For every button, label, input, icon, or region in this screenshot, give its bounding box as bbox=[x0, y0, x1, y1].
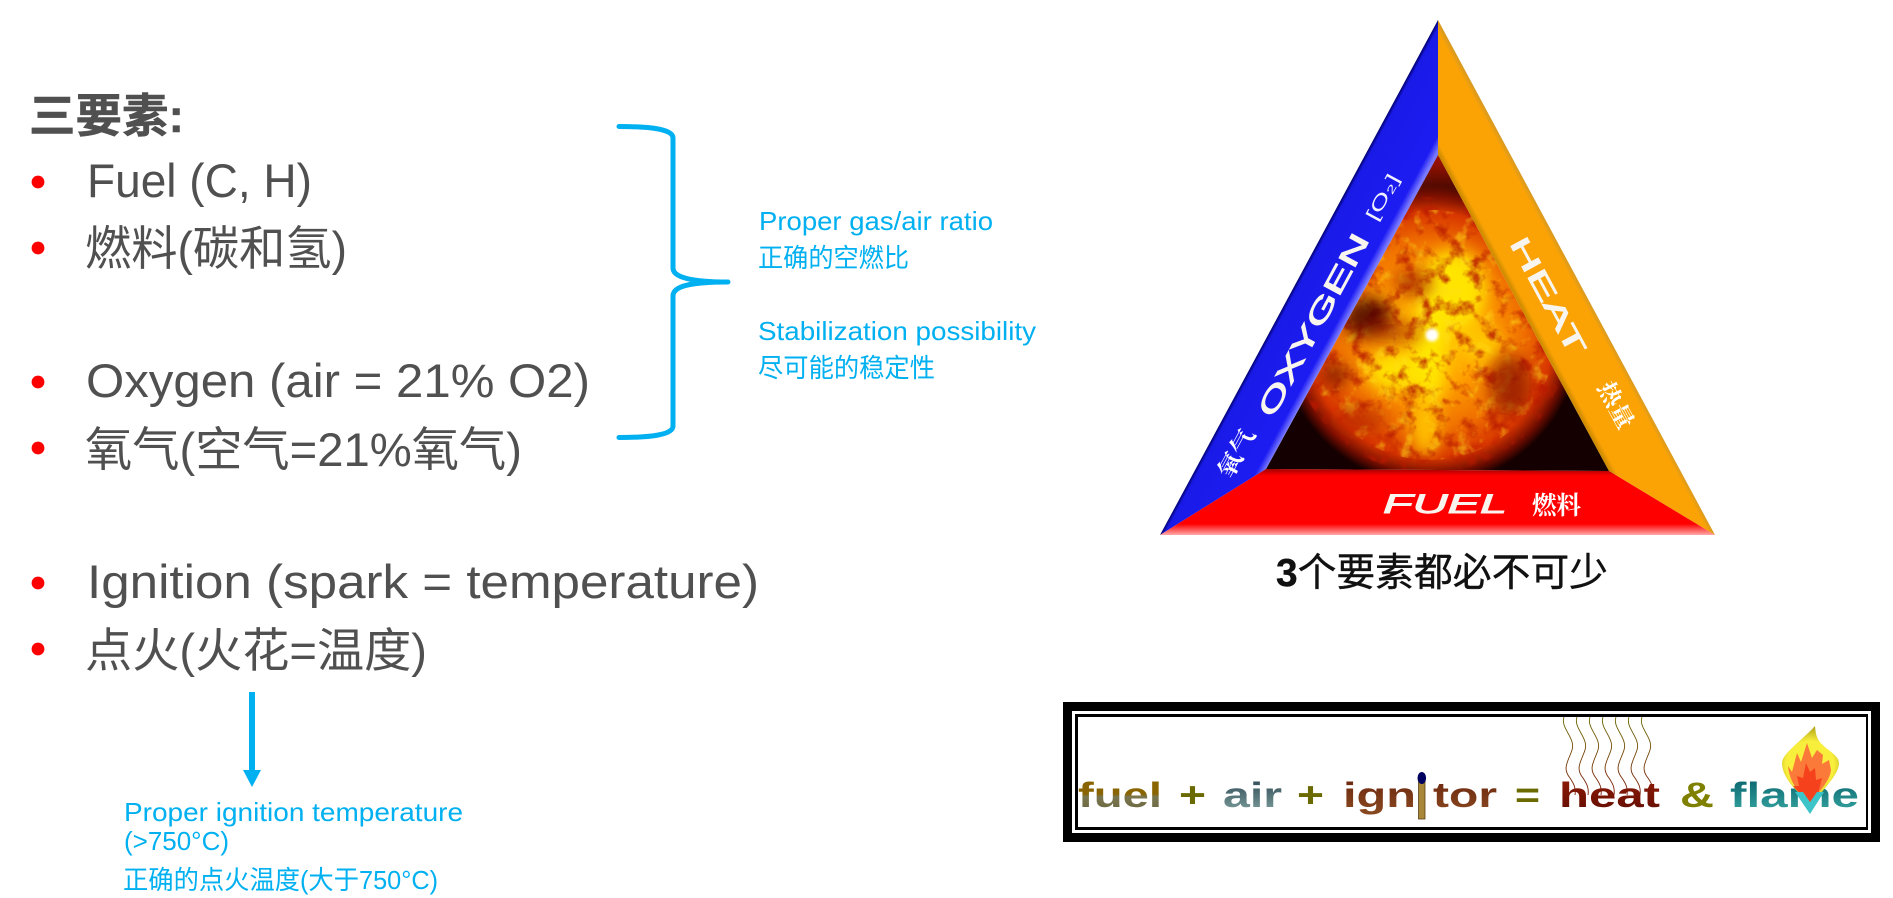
left column: three elements list bbox=[29, 90, 759, 677]
list item: oxygen: Oxygen (air = 21% O2) bbox=[86, 354, 590, 407]
heading: 三要素: bbox=[29, 90, 184, 142]
fuel side: red band bbox=[1160, 469, 1715, 535]
icon: flame bbox=[1782, 726, 1839, 814]
box frame bbox=[1063, 702, 1880, 842]
callout: proper ignition temperature bbox=[123, 797, 463, 895]
label: fuel: FUEL bbox=[1383, 489, 1507, 519]
list item: fuel in Chinese: 燃料(碳和氢) bbox=[85, 222, 347, 275]
callout line: stabilization possibility: Stabilization possibility bbox=[758, 316, 1036, 346]
label: fuel in Chinese: 燃料 bbox=[1531, 492, 1581, 520]
ampersand: & bbox=[1680, 776, 1714, 815]
list item: oxygen in Chinese: 氧气(空气=21%氧气) bbox=[85, 423, 522, 476]
heat side: orange band bbox=[1438, 20, 1715, 535]
plus sign: + bbox=[1297, 776, 1324, 815]
list item: fuel: Fuel (C, H) bbox=[87, 154, 312, 207]
equals sign: = bbox=[1515, 776, 1540, 815]
icon: match as letter i bbox=[1418, 772, 1426, 819]
label: oxygen in Chinese: 氧气 bbox=[1213, 425, 1260, 482]
fire image core bbox=[1260, 150, 1615, 475]
callout line: stabilization in Chinese: 尽可能的稳定性 bbox=[758, 353, 935, 383]
oxygen side: blue band bbox=[1160, 20, 1438, 535]
callout line: ignition temperature: Proper ignition temperature bbox=[124, 797, 463, 827]
heat wave lines bbox=[1563, 717, 1653, 795]
equation word: tor: tor bbox=[1433, 776, 1498, 815]
equation box bbox=[1063, 702, 1880, 842]
equation word: heat: heat bbox=[1559, 776, 1660, 815]
callout: gas air ratio and stabilization bbox=[758, 206, 1036, 383]
callout line: ignition temperature in Chinese: 正确的点火温度(大于750°C) bbox=[123, 865, 438, 895]
equation word: ign: ign bbox=[1343, 776, 1416, 815]
label: O2: [O₂] bbox=[1362, 170, 1403, 224]
plus sign: + bbox=[1179, 776, 1206, 815]
right brace bbox=[619, 126, 728, 438]
equation word: flame: flame bbox=[1730, 776, 1859, 815]
equation word: air: air bbox=[1223, 776, 1283, 815]
label: oxygen: OXYGEN bbox=[1252, 228, 1375, 422]
callout line: ratio in Chinese: 正确的空燃比 bbox=[758, 243, 909, 273]
callout line: proper gas air ratio: Proper gas/air ratio bbox=[759, 206, 993, 236]
label: heat: HEAT bbox=[1504, 232, 1592, 360]
list item: ignition in Chinese: 点火(火花=温度) bbox=[85, 624, 427, 677]
label: heat in Chinese: 热量 bbox=[1593, 377, 1638, 433]
fire triangle diagram bbox=[1160, 20, 1715, 535]
arrow: ignition to temperature bbox=[243, 692, 261, 787]
star point glow bbox=[1426, 328, 1438, 342]
list item: ignition: Ignition (spark = temperature) bbox=[87, 555, 759, 608]
bullet markers bbox=[32, 176, 44, 655]
triangle caption: 3个要素都必不可少 bbox=[1276, 552, 1608, 595]
callout line: above 750: (>750°C) bbox=[124, 826, 229, 856]
equation word: fuel: fuel bbox=[1078, 776, 1162, 815]
